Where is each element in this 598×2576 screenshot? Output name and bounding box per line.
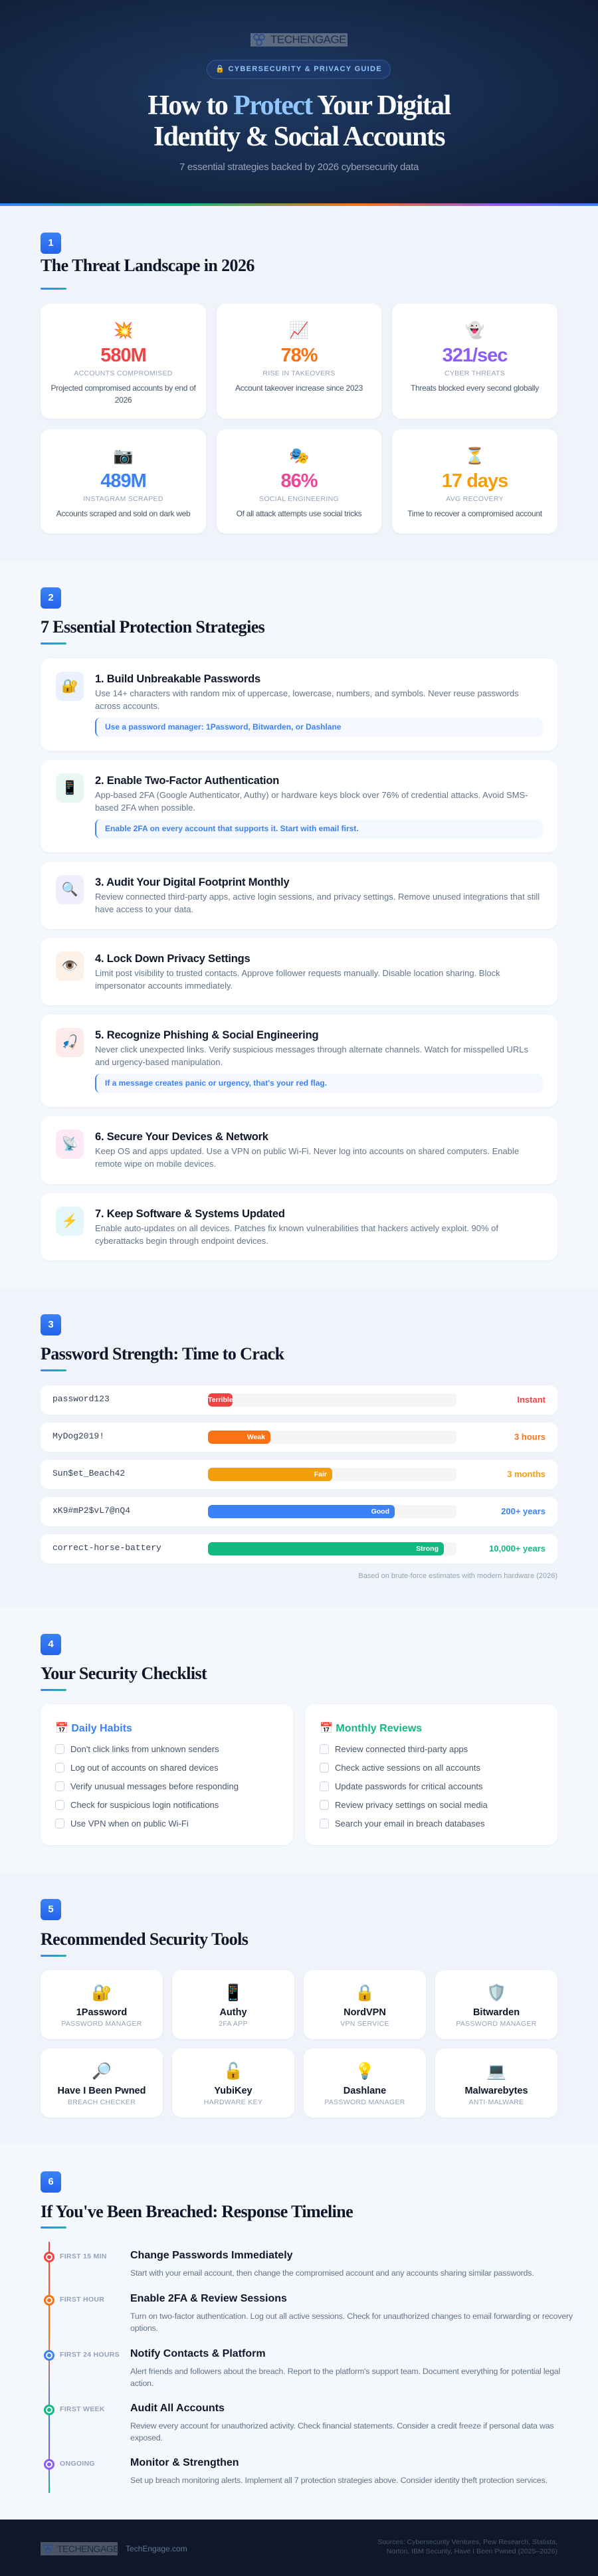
strategy 2: 📱 <box>62 781 78 795</box>
badge 5: 5 <box>48 1904 54 1915</box>
panel: daily habits: Check for suspicious login notifications <box>70 1800 219 1810</box>
card: 17 days: Time to recover a compromised account <box>407 509 542 518</box>
tool: Bitwarden <box>435 1970 557 2039</box>
tool: NordVPN: VPN SERVICE <box>340 2020 389 2028</box>
timeline: Review every account for unauthorized activity. Check financial statements. Consider a credit freeze if personal data was exposed. <box>130 2421 553 2442</box>
section 5: tools <box>0 1872 598 2144</box>
panel: monthly reviews: Review connected third-party apps <box>335 1744 468 1754</box>
title: How to Protect Your Digital <box>148 90 450 121</box>
tool: Have I Been Pwned <box>41 2048 163 2118</box>
row: MyDog2019! <box>41 1423 557 1452</box>
heading: 7 Essential Protection Strategies <box>41 617 264 637</box>
footer site: TechEngage.com <box>126 2544 187 2553</box>
card: 17 days: AVG RECOVERY <box>446 495 504 503</box>
card: 321/sec: 321/sec <box>443 345 507 366</box>
tool: YubiKey <box>172 2048 294 2118</box>
row: xK9#mP2$vL7@nQ4: Good <box>371 1508 389 1516</box>
footer sources: Sources: Cybersecurity Ventures, Pew Research, Statista, <box>377 2538 557 2546</box>
row: password123: Terrible <box>208 1396 233 1404</box>
row: password123: Instant <box>517 1395 546 1405</box>
tool: NordVPN <box>304 1970 426 2039</box>
card: 489M: 489M <box>100 470 146 492</box>
timeline line <box>49 2242 50 2493</box>
timeline: Monitor & Strengthen <box>130 2457 239 2468</box>
tool: Dashlane: Dashlane <box>344 2086 386 2096</box>
tool: Malwarebytes: Malwarebytes <box>464 2086 528 2096</box>
heading: Password Strength: Time to Crack <box>41 1344 284 1363</box>
tool: Bitwarden: PASSWORD MANAGER <box>456 2020 537 2028</box>
strategy 1: Use a password manager: 1Password, Bitwarden, or Dashlane <box>105 722 341 732</box>
section 2: strategies <box>0 561 598 1288</box>
row: MyDog2019!: Weak <box>247 1433 265 1441</box>
card: 580M: 580M <box>100 345 146 366</box>
section 4: checklist <box>0 1607 598 1872</box>
strategy cards <box>41 658 557 1260</box>
tool: Bitwarden: Bitwarden <box>473 2007 520 2018</box>
strategy 3: 🔍 <box>62 882 78 897</box>
tool: Authy: Authy <box>219 2007 247 2018</box>
timeline: Change Passwords Immediately <box>130 2250 293 2261</box>
badge 5 <box>41 1899 61 1920</box>
strategy 2 <box>41 760 557 852</box>
strategy 2: 2. Enable Two-Factor Authentication <box>95 775 279 787</box>
timeline: FIRST 24 HOURS <box>60 2351 120 2359</box>
footer sources: Norton, IBM Security, Have I Been Pwned (2025–2026) <box>387 2547 557 2555</box>
strategy 4: Limit post visibility to trusted contacts. Approve follower requests manually. Disable location sharing. Block impersonator accounts immediately. <box>95 968 500 991</box>
tool: NordVPN: NordVPN <box>344 2007 386 2018</box>
tool: 1Password: 🔐 <box>92 1984 112 2002</box>
strategy 4: 4. Lock Down Privacy Settings <box>95 953 250 965</box>
card: 86% <box>217 429 381 534</box>
strategy 3: 3. Audit Your Digital Footprint Monthly <box>95 876 290 888</box>
section 6: timeline <box>0 2144 598 2520</box>
strategy 1: Use 14+ characters with random mix of uppercase, lowercase, numbers, and symbols. Never reuse passwords across accounts. <box>95 688 519 711</box>
tool: Have I Been Pwned: 🔎 <box>92 2062 112 2080</box>
row: correct-horse-battery: 10,000+ years <box>489 1543 546 1553</box>
footer sources <box>377 2538 557 2555</box>
card: 580M <box>41 304 206 419</box>
subtitle: 7 essential strategies backed by 2026 cybersecurity data <box>179 161 419 173</box>
panel: monthly reviews: Review privacy settings on social media <box>335 1800 488 1810</box>
tool: Dashlane <box>304 2048 426 2118</box>
timeline: ONGOING <box>60 2460 95 2468</box>
card: 86%: SOCIAL ENGINEERING <box>259 495 339 503</box>
row: Sun$et_Beach42: Sun$et_Beach42 <box>52 1468 125 1478</box>
step: first hour <box>44 2293 573 2333</box>
panel: monthly reviews <box>305 1704 557 1845</box>
heading: If You've Been Breached: Response Timeline <box>41 2202 353 2221</box>
card: 580M: 💥 <box>114 322 133 340</box>
strategy 1: 1. Build Unbreakable Passwords <box>95 673 260 685</box>
timeline: FIRST 15 MIN <box>60 2252 107 2260</box>
badge 1 <box>41 233 61 254</box>
footnote: Based on brute-force estimates with modern hardware (2026) <box>358 1572 557 1580</box>
card: 489M <box>41 429 206 534</box>
footer logo: TECHENGAGE <box>57 2543 119 2554</box>
timeline: Turn on two-factor authentication. Log out all active sessions. Check for unauthorized changes to email forwarding or recovery options. <box>130 2312 573 2333</box>
card: 78% <box>217 304 381 419</box>
tool: 1Password: PASSWORD MANAGER <box>61 2020 142 2028</box>
card: 17 days: ⏳ <box>465 447 484 465</box>
icon: logo hexagons <box>253 34 265 46</box>
card: 86%: 86% <box>280 470 318 492</box>
logo: TECHENGAGE <box>270 33 346 46</box>
footer <box>0 2520 598 2576</box>
timeline: Enable 2FA & Review Sessions <box>130 2293 287 2304</box>
panel: daily habits: Use VPN when on public Wi-Fi <box>70 1819 189 1829</box>
badge 2: 2 <box>48 592 54 603</box>
card: 17 days <box>392 429 557 534</box>
row: xK9#mP2$vL7@nQ4 <box>41 1497 557 1526</box>
row: password123 <box>41 1385 557 1415</box>
strategy 7: Enable auto-updates on all devices. Patches fix known vulnerabilities that hackers actively exploit. 90% of cyberattacks begin through endpoint devices. <box>95 1223 498 1246</box>
tool: Dashlane: PASSWORD MANAGER <box>324 2098 405 2106</box>
badge 1: 1 <box>48 237 54 248</box>
strategy 5: Never click unexpected links. Verify suspicious messages through alternate channels. Watch for misspelled URLs and urgency-based manipulation. <box>95 1044 528 1067</box>
card: 580M: Projected compromised accounts by end of 2026 <box>50 383 196 405</box>
tool: Have I Been Pwned: Have I Been Pwned <box>58 2086 146 2096</box>
badge 2 <box>41 587 61 609</box>
strategy 4: 👁️ <box>62 959 78 973</box>
panel: monthly reviews: 📅 Monthly Reviews <box>320 1723 422 1734</box>
strategy 6: 📡 <box>62 1137 78 1151</box>
card: 78%: 📈 <box>289 322 309 340</box>
tool: Malwarebytes <box>435 2048 557 2118</box>
badge 3: 3 <box>48 1319 54 1330</box>
step: first week <box>44 2403 554 2442</box>
card: 489M: 📷 <box>114 447 133 465</box>
panel: daily habits: 📅 Daily Habits <box>55 1723 132 1734</box>
badge 4: 4 <box>48 1638 54 1650</box>
tool: YubiKey: YubiKey <box>214 2086 252 2096</box>
row: correct-horse-battery: Strong <box>416 1545 439 1553</box>
heading: The Threat Landscape in 2026 <box>41 256 254 275</box>
panel: monthly reviews: Search your email in breach databases <box>335 1819 484 1829</box>
section 3: password strength <box>0 1288 598 1607</box>
card: 321/sec: Threats blocked every second globally <box>411 383 539 393</box>
tool: YubiKey: 🔓 <box>223 2062 243 2080</box>
tool: Authy: 📱 <box>223 1984 243 2002</box>
panel: daily habits: Log out of accounts on shared devices <box>70 1763 219 1773</box>
row: xK9#mP2$vL7@nQ4: 200+ years <box>501 1506 546 1516</box>
timeline: FIRST WEEK <box>60 2405 105 2413</box>
step: ongoing <box>44 2457 548 2485</box>
card: 86%: Of all attack attempts use social tricks <box>237 509 361 518</box>
badge 3 <box>41 1314 61 1336</box>
strategy 1: 🔐 <box>62 679 78 694</box>
row: correct-horse-battery <box>41 1534 557 1563</box>
panel: daily habits: Verify unusual messages before responding <box>70 1781 239 1791</box>
strategy 6: Keep OS and apps updated. Use a VPN on public Wi-Fi. Never log into accounts on shared computers. Enable remote wipe on mobile devices. <box>95 1146 519 1169</box>
step: first 24 hours <box>44 2348 560 2388</box>
heading: Your Security Checklist <box>41 1664 207 1683</box>
strategy 1 <box>41 658 557 751</box>
row: Sun$et_Beach42: 3 months <box>507 1469 546 1479</box>
timeline: Audit All Accounts <box>130 2403 225 2414</box>
pill: category: 🔒 CYBERSECURITY & PRIVACY GUIDE <box>215 65 382 73</box>
strategy 2: Enable 2FA on every account that supports it. Start with email first. <box>105 824 359 833</box>
timeline: FIRST HOUR <box>60 2296 104 2304</box>
timeline <box>44 2242 573 2493</box>
tool: YubiKey: HARDWARE KEY <box>204 2098 262 2106</box>
tool: Authy: 2FA APP <box>219 2020 248 2028</box>
password bar chart <box>41 1385 557 1563</box>
strategy 5: 5. Recognize Phishing & Social Engineering <box>95 1029 318 1041</box>
card: 78%: Account takeover increase since 2023 <box>235 383 363 393</box>
card: 489M: Accounts scraped and sold on dark web <box>56 509 190 518</box>
strategy 3 <box>41 862 557 929</box>
strategy 3: Review connected third-party apps, active login sessions, and privacy settings. Remove unused integrations that still have access to your data. <box>95 892 540 914</box>
panel: daily habits: Don't click links from unknown senders <box>70 1744 219 1754</box>
strategy 6 <box>41 1116 557 1184</box>
tool: Malwarebytes: ANTI-MALWARE <box>469 2098 524 2106</box>
badge 4 <box>41 1634 61 1655</box>
footer logo <box>41 2542 118 2555</box>
strategy 7: 7. Keep Software & Systems Updated <box>95 1208 285 1220</box>
row: correct-horse-battery: correct-horse-battery <box>52 1543 161 1553</box>
timeline: Notify Contacts & Platform <box>130 2348 266 2359</box>
header <box>0 0 598 206</box>
card: 86%: 🎭 <box>289 447 309 465</box>
tool: Have I Been Pwned: BREACH CHECKER <box>68 2098 136 2106</box>
strategy 5 <box>41 1015 557 1107</box>
tool: 1Password: 1Password <box>76 2007 127 2018</box>
row: MyDog2019!: 3 hours <box>514 1432 546 1442</box>
stat cards <box>41 304 557 534</box>
strategy 7 <box>41 1193 557 1260</box>
card: 321/sec <box>392 304 557 419</box>
title <box>148 90 451 152</box>
gradient bar <box>0 203 598 206</box>
row: Sun$et_Beach42: Fair <box>314 1470 327 1478</box>
card: 321/sec: 👻 <box>465 322 484 340</box>
timeline: Start with your email account, then change the compromised account and any accounts sharing similar passwords. <box>130 2268 534 2278</box>
card: 489M: INSTAGRAM SCRAPED <box>83 495 163 503</box>
panel: monthly reviews: Update passwords for critical accounts <box>335 1781 483 1791</box>
strategy 5: 🎣 <box>62 1035 78 1050</box>
pill: category <box>207 60 391 79</box>
card: 78%: RISE IN TAKEOVERS <box>262 369 336 377</box>
card: 78%: 78% <box>280 345 318 366</box>
tool: 1Password <box>41 1970 163 2039</box>
strategy 2: App-based 2FA (Google Authenticator, Authy) or hardware keys block over 76% of credential attacks. Avoid SMS-based 2FA when possible. <box>95 790 528 813</box>
panel: monthly reviews: Check active sessions on all accounts <box>335 1763 480 1773</box>
panel: daily habits <box>41 1704 293 1845</box>
section 1: threat landscape <box>0 206 598 561</box>
card: 321/sec: CYBER THREATS <box>445 369 505 377</box>
tool: Bitwarden: 🛡️ <box>486 1984 506 2002</box>
row: MyDog2019!: MyDog2019! <box>52 1431 104 1441</box>
row: password123: password123 <box>52 1394 110 1404</box>
tool grid <box>41 1970 557 2118</box>
tool: Malwarebytes: 💻 <box>486 2062 506 2080</box>
card: 17 days: 17 days <box>442 470 508 492</box>
strategy 4 <box>41 938 557 1005</box>
timeline: Set up breach monitoring alerts. Implement all 7 protection strategies above. Consider identity theft protection services. <box>130 2476 548 2485</box>
title: Identity & Social Accounts <box>153 122 445 152</box>
badge 6 <box>41 2171 61 2193</box>
timeline: Alert friends and followers about the breach. Report to the platform's support team. Document everything for potential legal action. <box>130 2367 560 2388</box>
strategy 6: 6. Secure Your Devices & Network <box>95 1131 268 1143</box>
row: Sun$et_Beach42 <box>41 1460 557 1489</box>
tool: Authy <box>172 1970 294 2039</box>
strategy 5: If a message creates panic or urgency, that's your red flag. <box>105 1078 327 1088</box>
card: 580M: ACCOUNTS COMPROMISED <box>74 369 173 377</box>
badge 6: 6 <box>48 2176 54 2187</box>
row: xK9#mP2$vL7@nQ4: xK9#mP2$vL7@nQ4 <box>52 1506 130 1516</box>
heading: Recommended Security Tools <box>41 1930 248 1949</box>
step: first 15 min <box>44 2250 534 2278</box>
tool: Dashlane: 💡 <box>355 2062 375 2080</box>
strategy 7: ⚡ <box>62 1214 78 1229</box>
tool: NordVPN: 🔒 <box>355 1984 375 2002</box>
